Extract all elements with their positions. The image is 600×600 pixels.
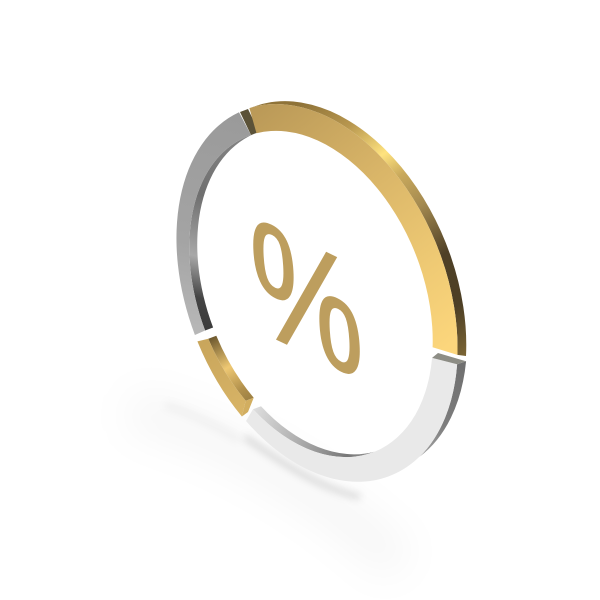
bottom end cap: [432, 353, 466, 364]
segment depth side: [189, 132, 259, 330]
ring segment: silver bottom: [246, 353, 466, 482]
cast shadow: [130, 405, 400, 565]
arc front face: [249, 104, 458, 355]
ring segment: small gold: [197, 336, 254, 416]
inner depth side: [253, 406, 375, 457]
segment front face: [176, 112, 251, 335]
ring segment: silver upper left: [176, 109, 259, 335]
small segment front face: [197, 339, 246, 416]
percent symbol: %: [245, 180, 368, 417]
small segment depth side: [208, 336, 254, 401]
small segment end cap: [242, 398, 254, 416]
segment end cap: [240, 109, 259, 135]
bottom front face: [246, 358, 457, 482]
right depth side: [419, 361, 466, 457]
ring segment: large gold arc: [249, 101, 466, 356]
arc depth side: [249, 101, 466, 356]
